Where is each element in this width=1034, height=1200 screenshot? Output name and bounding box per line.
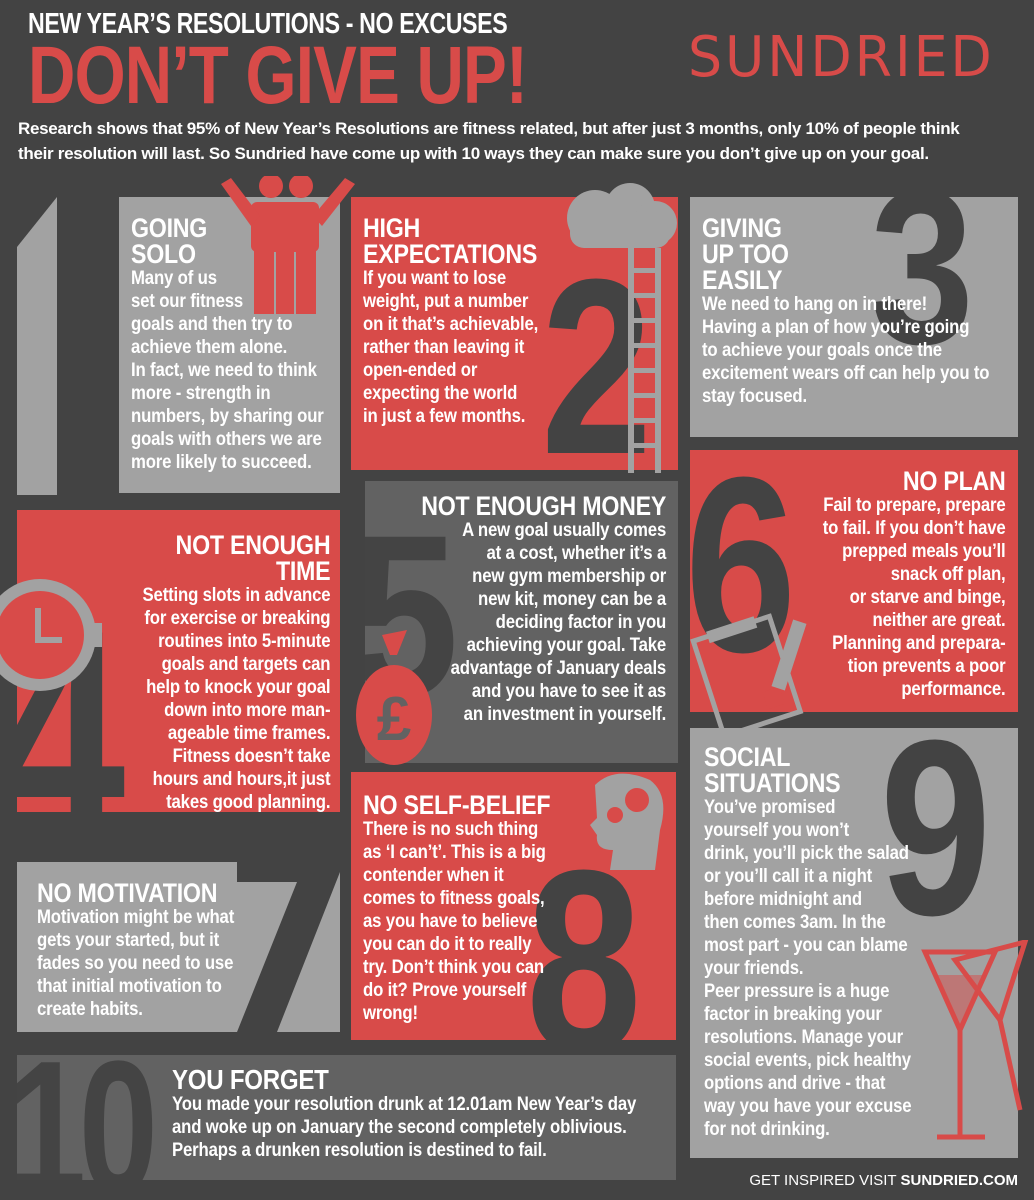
panel 1: going solo: goals with others we are	[131, 428, 322, 450]
panel 9: social situations: resolutions. Manage your	[704, 1026, 903, 1048]
panel 1: going solo: numbers, by sharing our	[131, 405, 324, 427]
panel 8: no self-belief: as ‘I can’t’. This is a big	[363, 841, 546, 863]
panel 5: not enough money: new kit, money can be a	[478, 588, 666, 610]
panel 2: high expectations: open-ended or	[363, 359, 477, 381]
panel 5: not enough money: new gym membership or	[472, 565, 666, 587]
panel 3: giving up too easily: excitement wears off can help you to	[702, 362, 989, 384]
panel 9: social situations: your friends.	[704, 957, 803, 979]
panel 8: no self-belief: do it? Prove yourself	[363, 979, 526, 1001]
panel 6: no plan: to fail. If you don’t have	[823, 517, 1006, 539]
panel 1: going solo: achieve them alone.	[131, 336, 287, 358]
panel 9: social situations: most part - you can blame	[704, 934, 908, 956]
panel 8: no self-belief: There is no such thing	[363, 818, 538, 840]
footer: GET INSPIRED VISIT SUNDRIED.COM	[749, 1172, 1018, 1189]
panel 3: giving up too easily: We need to hang on in there!	[702, 293, 927, 315]
panel 6: no plan: Fail to prepare, prepare	[824, 494, 1006, 516]
panel 6: no plan: prepped meals you’ll	[843, 540, 1006, 562]
panel 4: not enough time: hours and hours,it just	[152, 768, 330, 790]
panel 7: no motivation: NO MOTIVATION	[37, 878, 217, 908]
panel 2: high expectations: HIGH	[363, 213, 420, 243]
panel 10: you forget: You made your resolution drunk at 12.01am New Year’s day	[172, 1093, 636, 1115]
panel 8: no self-belief: as you have to believe	[363, 910, 537, 932]
icon: cloud and ladder	[567, 183, 677, 473]
panel 9: social situations: before midnight and	[704, 888, 862, 910]
panel 4: not enough time: TIME	[276, 556, 330, 586]
panel 9: social situations: SOCIAL	[704, 742, 790, 772]
panel 1: going solo: more likely to succeed.	[131, 451, 312, 473]
icon: cocktail glasses	[921, 940, 1028, 1140]
panel 6: no plan	[690, 450, 1018, 712]
panel 9: social situations: You’ve promised	[704, 796, 835, 818]
panel 2: high expectations: EXPECTATIONS	[363, 239, 537, 269]
panel 9: social situations: drink, you’ll pick the salad	[704, 842, 909, 864]
panel 9: social situations: SITUATIONS	[704, 768, 840, 798]
panel 4: not enough time: Fitness doesn’t take	[172, 745, 330, 767]
panel 6: no plan: snack off plan,	[891, 563, 1006, 585]
panel 8: no self-belief	[351, 772, 676, 1040]
panel 2: high expectations: on it that’s achievable,	[363, 313, 538, 335]
panel 3: giving up too easily: stay focused.	[702, 385, 807, 407]
panel 1: going solo: GOING	[131, 213, 207, 243]
panel 10: you forget: and woke up on January the second completely oblivious.	[172, 1116, 627, 1138]
panel 1: going solo	[119, 197, 340, 493]
panel 4: not enough time: ageable time frames.	[168, 722, 330, 744]
panel 8: no self-belief: you can do it to really	[363, 933, 531, 955]
panel 5: not enough money: achieving your goal. Take	[467, 634, 666, 656]
panel 8: no self-belief: try. Don’t think you can	[363, 956, 544, 978]
panel 4: not enough time: down into more man-	[164, 699, 330, 721]
panel 3: giving up too easily: GIVING	[702, 213, 782, 243]
panel 3: giving up too easily	[690, 197, 1018, 437]
title: NEW YEAR’S RESOLUTIONS - NO EXCUSES	[28, 8, 507, 40]
panel 9: social situations: way you have your excuse	[704, 1095, 911, 1117]
panel 5: not enough money	[365, 481, 678, 763]
panel 5: not enough money: an investment in yourself.	[464, 703, 666, 725]
panel 10: you forget: YOU FORGET	[172, 1064, 329, 1095]
panel 8: no self-belief: NO SELF-BELIEF	[363, 790, 550, 820]
panel 9: social situations	[690, 728, 1018, 1158]
panel 10: you forget	[17, 1055, 676, 1180]
panel 4: not enough time: help to knock your goal	[146, 676, 330, 698]
panel 1: going solo: goals and then try to	[131, 313, 292, 335]
panel 2: high expectations: rather than leaving it	[363, 336, 524, 358]
panel 4: not enough time: goals and targets can	[161, 653, 330, 675]
panel 1: going solo: Many of us	[131, 267, 217, 289]
panel 1: going solo: In fact, we need to think	[131, 359, 317, 381]
panel 2: high expectations	[351, 197, 678, 470]
panel 3: giving up too easily: UP TOO	[702, 239, 789, 269]
icon: money bag	[356, 630, 432, 765]
panel 6: no plan: neither are great.	[873, 609, 1006, 631]
panel 5: not enough money: at a cost, whether it’s a	[486, 542, 666, 564]
panel 1: going solo: set our fitness	[131, 290, 243, 312]
panel 7: no motivation: that initial motivation to	[37, 975, 222, 997]
icon: money bag: £	[377, 685, 411, 754]
logo: SUNDRIED	[688, 25, 995, 90]
panel 8: no self-belief: contender when it	[363, 864, 504, 886]
panel 2: high expectations: weight, put a number	[363, 290, 528, 312]
panel 5: not enough money: deciding factor in you	[496, 611, 666, 633]
panel 9: social situations: social events, pick healthy	[704, 1049, 911, 1071]
panel 9: social situations: yourself you won’t	[704, 819, 849, 841]
panel 5: not enough money: advantage of January deals	[451, 657, 666, 679]
panel 6: no plan: or starve and binge,	[850, 586, 1006, 608]
panel 6: no plan: tion prevents a poor	[848, 655, 1006, 677]
panel 7: no motivation: Motivation might be what	[37, 906, 234, 928]
panel 8: no self-belief: comes to fitness goals,	[363, 887, 545, 909]
panel 7: no motivation	[17, 862, 340, 1032]
panel 9: social situations: factor in breaking your	[704, 1003, 882, 1025]
panel 9: social situations: or you’ll call it a night	[704, 865, 872, 887]
panel 2: high expectations: If you want to lose	[363, 267, 506, 289]
panel 4: not enough time: for exercise or breaking	[144, 607, 330, 629]
panel 5: not enough money: NOT ENOUGH MONEY	[421, 491, 666, 521]
panel 2: high expectations: expecting the world	[363, 382, 517, 404]
panel 6: no plan: NO PLAN	[903, 466, 1006, 496]
panel 9: social situations: Peer pressure is a huge	[704, 980, 889, 1002]
number 1	[17, 197, 57, 495]
icon: head with gears	[590, 774, 664, 870]
icon: clipboard and pencil	[690, 613, 806, 728]
panel 4: not enough time: NOT ENOUGH	[175, 530, 330, 560]
icon: two people	[221, 176, 355, 314]
intro text: Research shows that 95% of New Year’s Resolutions are fitness related, but after just 3 months, only 10% of people think their resolution will last. So Sundried have come up with 10 ways they can make sure you don’t give up on your goal.	[18, 119, 959, 163]
panel 4: not enough time: Setting slots in advance	[142, 584, 330, 606]
panel 2: high expectations: in just a few months.	[363, 405, 525, 427]
panel 5: not enough money: and you have to see it as	[472, 680, 666, 702]
icon: clock	[0, 579, 102, 691]
panel 10: you forget: Perhaps a drunken resolution is destined to fail.	[172, 1139, 547, 1161]
panel 1: going solo: more - strength in	[131, 382, 270, 404]
panel 6: no plan: performance.	[902, 678, 1006, 700]
panel 3: giving up too easily: EASILY	[702, 265, 782, 295]
panel 9: social situations: for not drinking.	[704, 1118, 830, 1140]
panel 9: social situations: then comes 3am. In the	[704, 911, 886, 933]
panel 4: not enough time	[17, 510, 340, 812]
panel 4: not enough time: routines into 5-minute	[158, 630, 330, 652]
panel 7: no motivation: fades so you need to use	[37, 952, 233, 974]
panel 8: no self-belief: wrong!	[363, 1002, 418, 1024]
panel 3: giving up too easily: Having a plan of how you’re going	[702, 316, 969, 338]
panel 3: giving up too easily: to achieve your goals once the	[702, 339, 942, 361]
panel 6: no plan: Planning and prepara-	[833, 632, 1006, 654]
panel 1: going solo: SOLO	[131, 239, 196, 269]
panel 5: not enough money: A new goal usually comes	[462, 519, 666, 541]
panel 9: social situations: options and drive - that	[704, 1072, 885, 1094]
title: DON’T GIVE UP!	[28, 30, 527, 121]
panel 7: no motivation: gets your started, but it	[37, 929, 219, 951]
panel 7: no motivation: create habits.	[37, 998, 143, 1020]
